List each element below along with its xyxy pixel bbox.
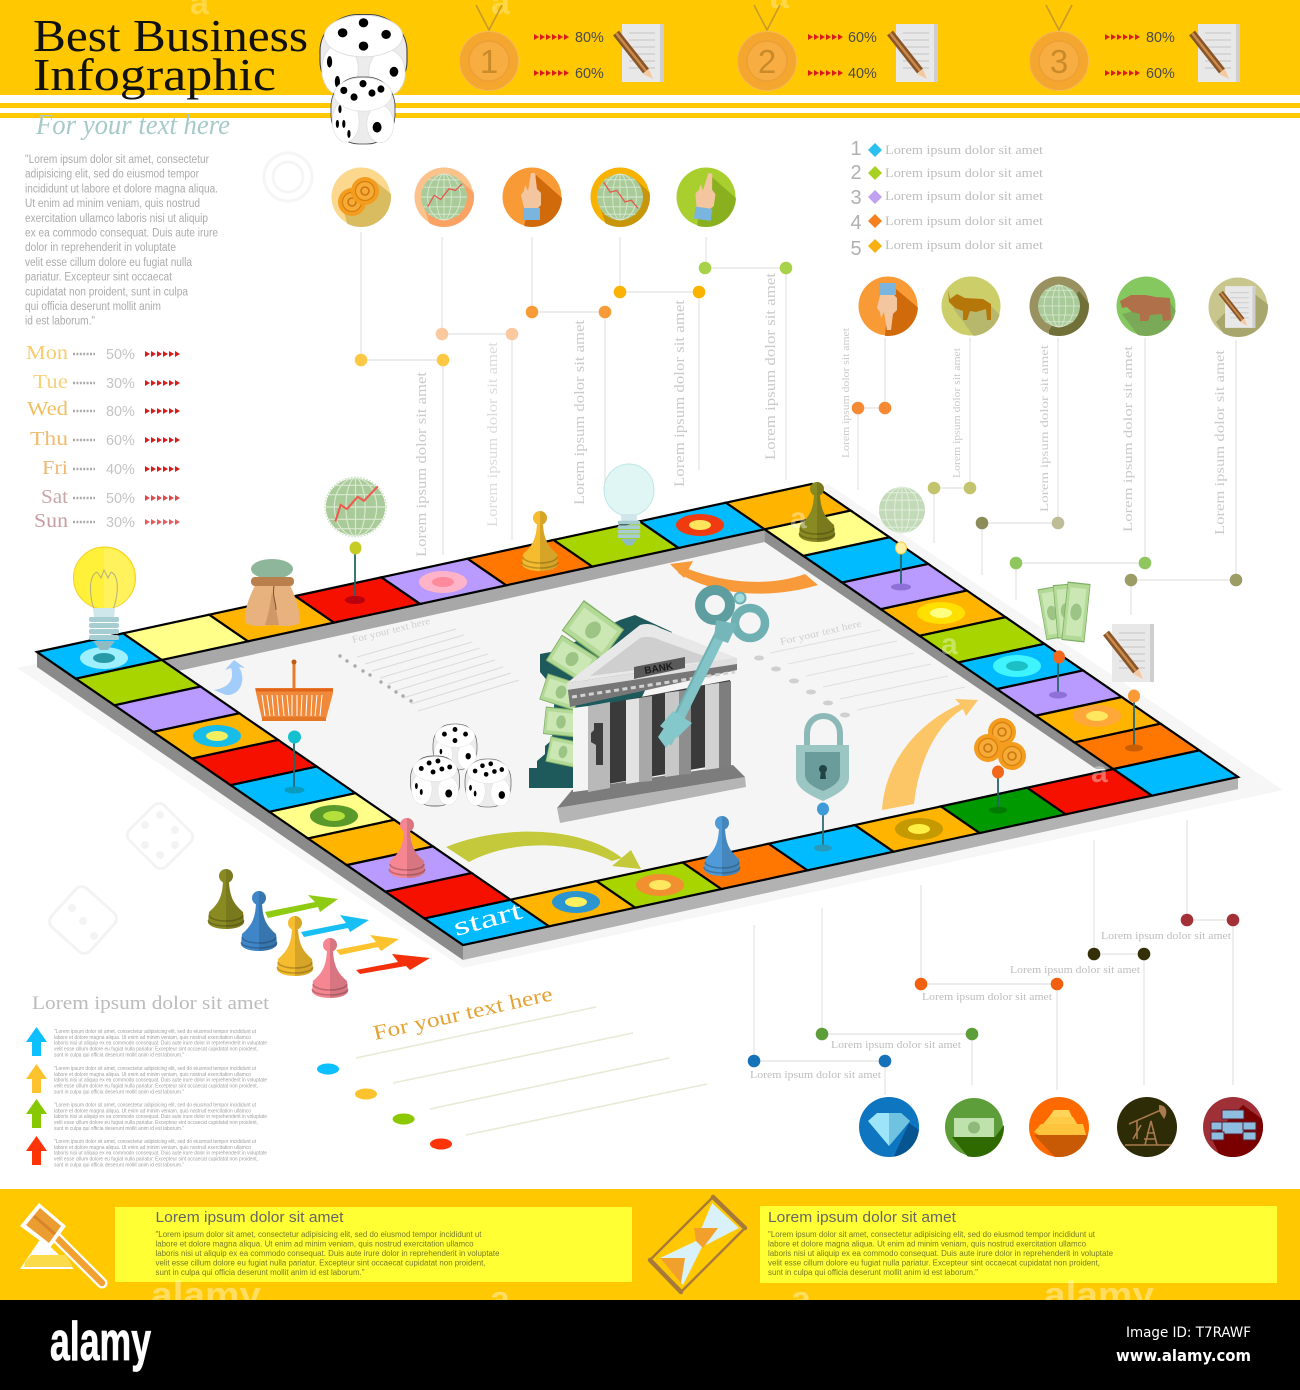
field text: right notes	[754, 618, 965, 718]
icon row: top left circles	[332, 168, 736, 227]
footer black strip with alamy branding: alamy	[50, 1310, 151, 1372]
icon: hourglass	[650, 1197, 745, 1292]
panel: footer box right: sunt in culpa qui officia deserunt mollit anim id est laborum."	[768, 1268, 978, 1277]
chart: weekday percentages: 50%	[106, 347, 135, 363]
title: Best Business	[33, 10, 308, 61]
board field	[162, 529, 1113, 899]
list: lower left arrows with text: sunt in culpa qui officia deserunt mollit anim id est laborum."	[54, 1162, 184, 1168]
chart: weekday percentages	[26, 342, 180, 532]
watermark fragments	[151, 502, 1154, 1319]
icon row: top right circles	[858, 276, 1268, 337]
key	[658, 590, 765, 748]
legend: numbered list: 1	[850, 138, 862, 160]
list: lower left arrows with text: laboris nisi ut aliquip ex ea commodo consequat. Duis aute irure dolor in reprehenderit in voluptate	[54, 1041, 267, 1047]
panel: footer box right	[760, 1206, 1277, 1283]
legend: numbered list: Lorem ipsum dolor sit amet	[885, 165, 1043, 180]
decorative faint ring	[264, 153, 312, 201]
labels: bottom right	[750, 930, 1231, 1081]
text block: intro paragraph: id est laborum."	[25, 316, 95, 328]
arrow: yellow curved	[882, 699, 978, 810]
vertical labels: top left: Lorem ipsum dolor sit amet	[485, 341, 501, 527]
legend: numbered list: 5	[850, 238, 862, 260]
connectors: top right	[852, 338, 1242, 615]
list: lower left arrows with text: laboris nisi ut aliquip ex ea commodo consequat. Duis aute irure dolor in reprehenderit in voluptate	[54, 1078, 267, 1084]
icon: money bag	[245, 559, 300, 626]
vertical labels: top left: Lorem ipsum dolor sit amet	[763, 272, 779, 460]
icon: coins on pin	[974, 718, 1026, 814]
vertical labels: top right: Lorem ipsum dolor sit amet	[952, 348, 963, 478]
panel: footer box left: laboris nisi ut aliquip ex ea commodo consequat. Duis aute irure dolor in reprehenderit in voluptate	[156, 1249, 500, 1258]
panel: medal 2 stats	[738, 5, 938, 90]
text block: intro paragraph: dolor in reprehenderit in voluptate	[25, 242, 176, 254]
panel: footer box left: labore et dolore magna aliqua. Ut enim ad minim veniam, quis nostrud exercitation ullamco	[156, 1240, 474, 1248]
chart: weekday percentages: 60%	[106, 433, 135, 449]
footer black strip with alamy branding: www.alamy.com	[1116, 1346, 1251, 1365]
board cell rings	[80, 514, 1121, 913]
text block: intro paragraph: adipisicing elit, sed do eiusmod tempor	[25, 169, 199, 181]
text block: intro paragraph	[25, 154, 218, 328]
watermark fragments: alamy	[151, 1274, 261, 1315]
vertical labels: top right: Lorem ipsum dolor sit amet	[1120, 346, 1135, 532]
vertical labels: top left	[414, 272, 779, 557]
icon: padlock on pin	[796, 716, 849, 852]
icon: money on pin	[1038, 582, 1090, 698]
panel: footer box left: Lorem ipsum dolor sit amet	[156, 1209, 344, 1226]
list: lower left arrows with text: velit esse cillum dolore eu fugiat nulla pariatur. Excepteur sint occaecat cupidatat non proident,	[54, 1120, 258, 1126]
list: lower left arrows with text: laboris nisi ut aliquip ex ea commodo consequat. Duis aute irure dolor in reprehenderit in voluptate	[54, 1114, 267, 1120]
bank building	[557, 624, 746, 823]
labels: bottom right: Lorem ipsum dolor sit amet	[1010, 964, 1140, 976]
panel: medal 3 stats: 3	[1050, 43, 1068, 80]
labels: bottom right: Lorem ipsum dolor sit amet	[922, 991, 1052, 1003]
labels: bottom right: Lorem ipsum dolor sit amet	[1101, 930, 1231, 942]
watermark fragments: alamy	[1044, 1274, 1154, 1315]
text block: intro paragraph: velit esse cillum dolore eu fugiat nulla	[25, 257, 193, 269]
panel: footer box left: "Lorem ipsum dolor sit amet, consectetur adipisicing elit, sed do eiusmod tempor incididunt ut	[156, 1230, 482, 1239]
money arch	[540, 601, 624, 767]
panel: footer box right: "Lorem ipsum dolor sit amet, consectetur adipisicing elit, sed do eiusmod tempor incididunt ut	[768, 1230, 1096, 1239]
vertical labels: top right: Lorem ipsum dolor sit amet	[1037, 344, 1051, 512]
pawn: blue on board	[704, 816, 740, 876]
panel: medal 3 stats: 80%	[1146, 30, 1175, 46]
legend: numbered list	[850, 138, 1043, 260]
panel: medal 2 stats: 40%	[848, 66, 877, 82]
footer black strip with alamy branding: Image ID: T7RAWF	[1126, 1325, 1251, 1341]
arrow: blue crescent	[214, 660, 245, 695]
list: lower left arrows with text	[26, 1027, 267, 1168]
bank rear stairs	[529, 615, 672, 788]
panel: footer box left: sunt in culpa qui officia deserunt mollit anim id est laborum."	[156, 1268, 365, 1277]
watermark fragments: a	[790, 502, 807, 535]
panel: medal 1 stats	[460, 5, 664, 90]
pawn: yellow on board	[522, 511, 558, 571]
subtitle script: For your text here	[35, 110, 230, 141]
list: lower left arrows with text: velit esse cillum dolore eu fugiat nulla pariatur. Excepteur sint occaecat cupidatat non proident,	[54, 1046, 258, 1052]
vertical labels: top right: Lorem ipsum dolor sit amet	[1213, 350, 1228, 535]
chart: weekday percentages: Thu	[30, 428, 68, 450]
watermark fragments: a	[941, 628, 958, 661]
vertical labels: top left: Lorem ipsum dolor sit amet	[414, 371, 430, 557]
icon: basket	[255, 660, 333, 721]
watermark fragments: a	[791, 1278, 812, 1319]
icon: globe chart on pin	[325, 477, 386, 604]
panel: medal 1 stats: 80%	[575, 30, 604, 46]
footer band	[0, 1189, 1300, 1300]
text block: intro paragraph: exercitation ullamco laboris nisi ut aliquip	[25, 213, 208, 225]
icon: header dice	[320, 14, 407, 144]
connectors: top left	[355, 232, 792, 555]
chart: weekday percentages: Wed	[27, 398, 68, 420]
icon: gavel	[20, 1203, 102, 1283]
legend: numbered list: Lorem ipsum dolor sit amet	[885, 237, 1043, 252]
vertical labels: top left: Lorem ipsum dolor sit amet	[572, 319, 588, 505]
chart: weekday percentages: 30%	[106, 376, 135, 392]
vertical labels: top right: Lorem ipsum dolor sit amet	[841, 328, 852, 458]
list: lower left arrows with text: labore et dolore magna aliqua. Ut enim ad minim veniam, quis nostrud exercitation ullamco	[54, 1072, 251, 1078]
list: lower left arrows with text: "Lorem ipsum dolor sit amet, consectetur adipisicing elit, sed do eiusmod tempor incididunt ut	[54, 1029, 256, 1035]
panel: medal 1 stats: 1	[480, 43, 498, 80]
pawn: olive on board	[799, 482, 835, 542]
arrow: olive curved	[446, 832, 641, 869]
board cells	[37, 484, 1238, 945]
legend: numbered list: Lorem ipsum dolor sit amet	[885, 213, 1043, 228]
list: lower left arrows with text: "Lorem ipsum dolor sit amet, consectetur adipisicing elit, sed do eiusmod tempor incididunt ut	[54, 1066, 256, 1072]
labels: bottom right: Lorem ipsum dolor sit amet	[750, 1069, 881, 1081]
list: lower left arrows with text: sunt in culpa qui officia deserunt mollit anim id est laborum."	[54, 1052, 184, 1058]
text block: intro paragraph: qui officia deserunt mollit anim	[25, 301, 161, 313]
bank sign	[634, 657, 685, 679]
icon: pale globe on pin	[879, 487, 925, 590]
title	[33, 10, 308, 100]
chart: weekday percentages: Tue	[33, 371, 68, 393]
connectors: bottom right	[748, 820, 1239, 1095]
vertical labels: top left: Lorem ipsum dolor sit amet	[672, 299, 688, 487]
chart: weekday percentages: Mon	[26, 342, 68, 364]
list: lower left arrows with text: velit esse cillum dolore eu fugiat nulla pariatur. Excepteur sint occaecat cupidatat non proident,	[54, 1156, 258, 1162]
list: lower left arrows with text: sunt in culpa qui officia deserunt mollit anim id est laborum."	[54, 1126, 184, 1132]
list: lower left arrows with text: "Lorem ipsum dolor sit amet, consectetur adipisicing elit, sed do eiusmod tempor incididunt ut	[54, 1102, 256, 1108]
panel: footer box right: velit esse cillum dolore eu fugiat nulla pariatur. Excepteur sint occaecat cupidatat non proident,	[768, 1259, 1100, 1268]
faint dice decoration	[46, 800, 196, 957]
title: Infographic	[33, 49, 276, 100]
list: lower left arrows with text: velit esse cillum dolore eu fugiat nulla pariatur. Excepteur sint occaecat cupidatat non proident,	[54, 1083, 258, 1089]
ground shadow	[17, 484, 1283, 968]
pawn: pink on board	[389, 818, 425, 878]
chart: weekday percentages: Sat	[41, 486, 68, 508]
watermark fragments: a	[1091, 756, 1108, 789]
chart: weekday percentages: Sun	[34, 510, 68, 532]
panel: medal 1 stats: 60%	[575, 66, 604, 82]
chart: weekday percentages: 30%	[106, 515, 135, 531]
icon: document on pin	[1106, 624, 1154, 752]
board inner walls	[162, 529, 1113, 769]
list: lower left arrows with text: laboris nisi ut aliquip ex ea commodo consequat. Duis aute irure dolor in reprehenderit in voluptate	[54, 1151, 267, 1157]
panel: footer box right: labore et dolore magna aliqua. Ut enim ad minim veniam, quis nostrud exercitation ullamco	[768, 1240, 1087, 1248]
legend: numbered list: 2	[850, 162, 862, 184]
field text: left notes	[338, 616, 519, 711]
icon: bank with money and key	[529, 590, 765, 823]
panel: medal 2 stats: 2	[758, 43, 776, 80]
list: lower left arrows with text: labore et dolore magna aliqua. Ut enim ad minim veniam, quis nostrud exercitation ullamco	[54, 1108, 251, 1114]
icon: yellow bulb	[74, 547, 136, 650]
start label: start	[450, 895, 526, 942]
panel: medal 3 stats	[1030, 5, 1240, 90]
vertical labels: top right	[841, 328, 1228, 535]
legend: numbered list: Lorem ipsum dolor sit amet	[885, 142, 1043, 157]
panel: footer box right: Lorem ipsum dolor sit amet	[768, 1209, 957, 1226]
panel: footer box left	[115, 1207, 632, 1282]
list: lower left arrows with text: labore et dolore magna aliqua. Ut enim ad minim veniam, quis nostrud exercitation ullamco	[54, 1035, 251, 1041]
text block: intro paragraph: pariatur. Excepteur sint occaecat	[25, 272, 173, 284]
icon row: bottom right circles	[859, 1097, 1263, 1157]
list: lower left arrows with text: "Lorem ipsum dolor sit amet, consectetur adipisicing elit, sed do eiusmod tempor incididunt ut	[54, 1139, 256, 1145]
panel: for your text here list: For your text here	[371, 982, 555, 1045]
icon: three dice	[410, 724, 511, 807]
chart: weekday percentages: 80%	[106, 404, 135, 420]
arrow: orange curved	[670, 561, 818, 594]
watermark fragments: a	[490, 1278, 511, 1319]
game board	[37, 484, 1238, 960]
legend: numbered list: Lorem ipsum dolor sit amet	[885, 188, 1043, 203]
chart: weekday percentages: 50%	[106, 491, 135, 507]
heading: lower left: Lorem ipsum dolor sit amet	[32, 993, 270, 1014]
pawn set with arrows	[208, 869, 430, 998]
text block: intro paragraph: "Lorem ipsum dolor sit amet, consectetur	[25, 154, 209, 166]
legend: numbered list: 3	[850, 187, 862, 209]
panel: medal 2 stats: 60%	[848, 30, 877, 46]
panel: footer box right: laboris nisi ut aliquip ex ea commodo consequat. Duis aute irure dolor in reprehenderit in voluptate	[768, 1249, 1114, 1258]
header band	[0, 0, 1300, 118]
text block: intro paragraph: Ut enim ad minim veniam, quis nostrud	[25, 198, 200, 210]
field text: right notes: For your text here	[779, 618, 863, 648]
labels: bottom right: Lorem ipsum dolor sit amet	[831, 1039, 961, 1051]
icon: pin teal	[284, 730, 304, 794]
field text: left notes: For your text here	[351, 616, 432, 646]
icon: blue bulb	[604, 464, 654, 546]
bank sign: BANK	[644, 661, 675, 677]
list: lower left arrows with text: labore et dolore magna aliqua. Ut enim ad minim veniam, quis nostrud exercitation ullamco	[54, 1145, 251, 1151]
text block: intro paragraph: cupidatat non proident, sunt in culpa	[25, 286, 189, 298]
chart: weekday percentages: 40%	[106, 462, 135, 478]
text block: intro paragraph: ex ea commodo consequat. Duis aute irure	[25, 228, 218, 240]
board outer walls	[37, 652, 1238, 960]
panel: footer box left: velit esse cillum dolore eu fugiat nulla pariatur. Excepteur sint occaecat cupidatat non proident,	[156, 1259, 486, 1268]
legend: numbered list: 4	[850, 212, 862, 234]
panel: for your text here list	[317, 982, 707, 1150]
footer black strip with alamy branding	[0, 1300, 1300, 1390]
panel: medal 3 stats: 60%	[1146, 66, 1175, 82]
chart: weekday percentages: Fri	[42, 457, 68, 479]
list: lower left arrows with text: sunt in culpa qui officia deserunt mollit anim id est laborum."	[54, 1089, 184, 1095]
text block: intro paragraph: incididunt ut labore et dolore magna aliqua.	[25, 183, 218, 195]
